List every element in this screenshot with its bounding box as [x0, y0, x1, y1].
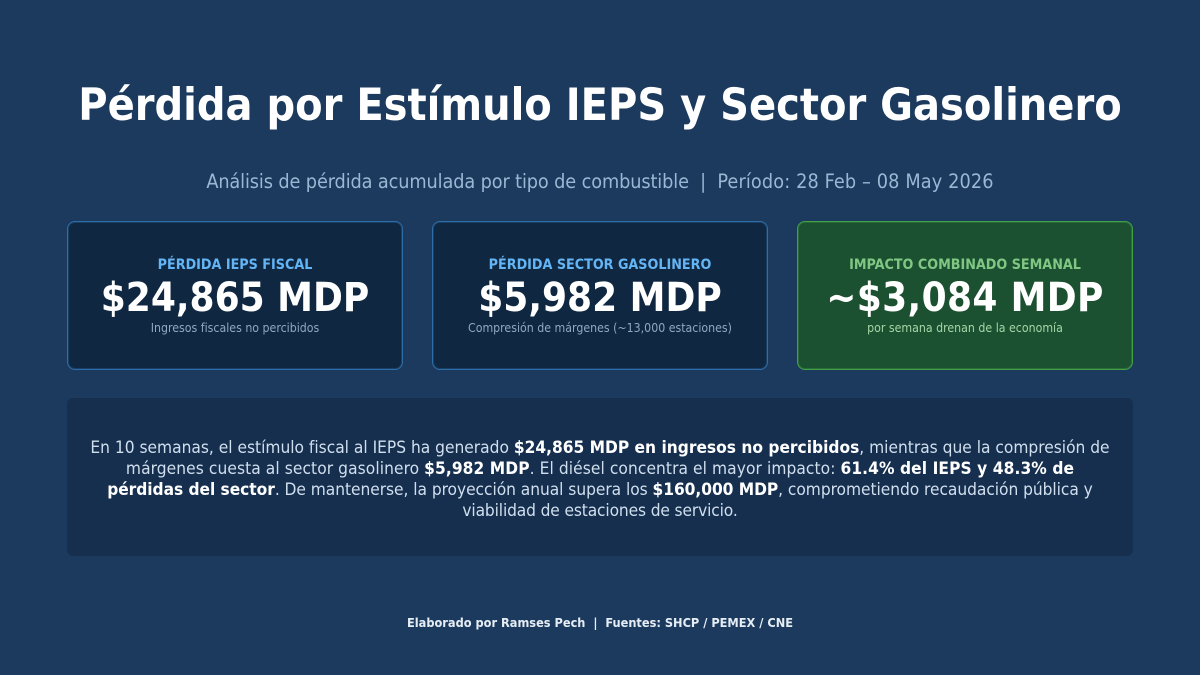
value: $5,982 MDP [478, 275, 722, 321]
panel: summary text [67, 398, 1133, 556]
note: Compresión de márgenes (~13,000 estaciones) [468, 321, 732, 335]
note: Ingresos fiscales no percibidos [151, 321, 319, 335]
label: IMPACTO COMBINADO SEMANAL [849, 257, 1081, 273]
panel: pérdida sector gasolinero [432, 221, 768, 370]
label: PÉRDIDA IEPS FISCAL [158, 257, 312, 273]
summary paragraph: viabilidad de estaciones de servicio. [462, 501, 738, 521]
summary paragraph: En 10 semanas, el estímulo fiscal al IEPS ha generado $24,865 MDP en ingresos no percibidos, mientras que la compresión de [90, 438, 1110, 458]
panel: impacto combinado semanal [797, 221, 1133, 370]
note: por semana drenan de la economía [867, 321, 1063, 335]
label: PÉRDIDA SECTOR GASOLINERO [489, 257, 711, 273]
title: Pérdida por Estímulo IEPS y Sector Gasolinero [78, 80, 1122, 131]
footer: Elaborado por Ramses Pech | Fuentes: SHCP / PEMEX / CNE [407, 615, 793, 630]
value: $24,865 MDP [101, 275, 369, 321]
summary paragraph: pérdidas del sector. De mantenerse, la proyección anual supera los $160,000 MDP, comprometiendo recaudación pública y [107, 480, 1093, 500]
subtitle: Análisis de pérdida acumulada por tipo de combustible | Período: 28 Feb – 08 May 2026 [206, 170, 994, 193]
panel: pérdida IEPS fiscal [67, 221, 403, 370]
value: ~$3,084 MDP [826, 275, 1104, 321]
summary paragraph: márgenes cuesta al sector gasolinero $5,982 MDP. El diésel concentra el mayor impacto: 61.4% del IEPS y 48.3% de [126, 459, 1074, 479]
summary paragraph [90, 438, 1110, 521]
